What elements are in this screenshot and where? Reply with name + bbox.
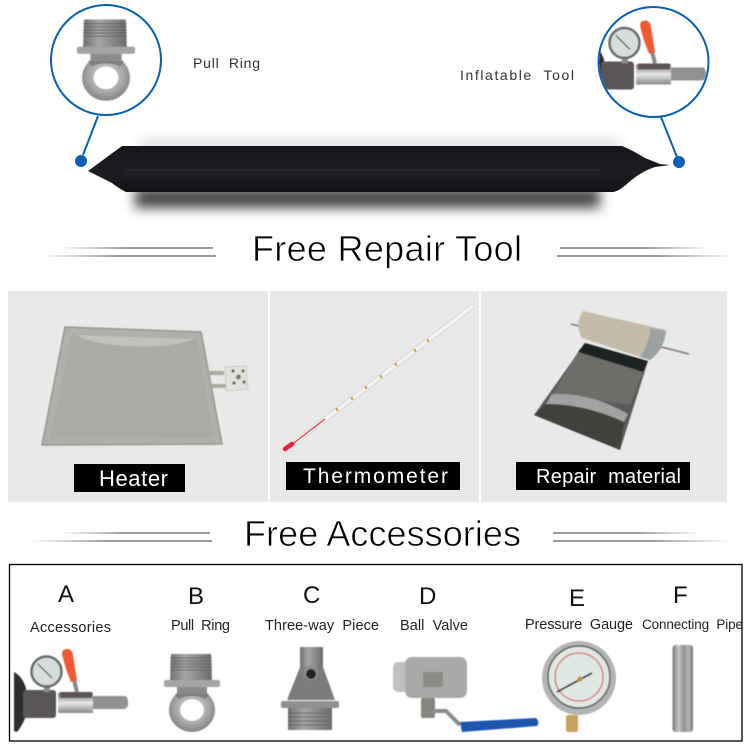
heading: free repair tool: Free Repair Tool (252, 228, 522, 269)
item F: connecting pipe (642, 582, 743, 732)
label: thermometer (286, 462, 460, 490)
icon: thermometer (285, 306, 473, 449)
icon: inflatable tool (14, 649, 128, 732)
panel: repair material (481, 291, 727, 502)
item A: accessories (14, 581, 128, 732)
item C: three-way piece (265, 582, 379, 730)
item B: pull ring (164, 583, 230, 732)
item A: accessories: Accessories (30, 620, 111, 636)
item C: three-way piece: C (303, 582, 320, 609)
callout: pull ring (51, 5, 161, 167)
icon: three-way piece (281, 647, 339, 730)
panel: thermometer (270, 291, 479, 502)
decorative heading lines left (30, 532, 212, 542)
label: heater: Heater (99, 466, 168, 491)
decorative heading lines right (557, 247, 735, 257)
label: heater (74, 464, 185, 492)
icon: connecting pipe (672, 645, 693, 732)
label: repair material (516, 462, 690, 490)
airbag product (88, 140, 670, 208)
item E: pressure gauge: Pressure Gauge (525, 617, 633, 633)
item D: ball valve (393, 583, 538, 732)
item F: connecting pipe: F (673, 582, 688, 609)
label: thermometer: Thermometer (303, 465, 448, 488)
icon: pull ring (164, 654, 220, 732)
icon: pull ring detail (77, 20, 135, 101)
icon: heater plate (42, 327, 248, 445)
decorative heading lines right (553, 532, 730, 542)
item F: connecting pipe: Connecting Pipe (642, 617, 743, 632)
item D: ball valve: Ball Valve (400, 618, 468, 634)
icon: inflatable tool detail (600, 20, 706, 90)
panel: heater (8, 291, 268, 502)
icon: ball valve (393, 657, 538, 732)
item C: three-way piece: Three-way Piece (265, 618, 379, 634)
decorative heading lines left (40, 247, 216, 257)
label: repair material: Repair material (536, 466, 681, 488)
item B: pull ring: B (188, 583, 204, 610)
heading: free accessories: Free Accessories (244, 513, 521, 554)
item B: pull ring: Pull Ring (171, 618, 230, 634)
item D: ball valve: D (419, 583, 436, 610)
item E: pressure gauge (525, 585, 633, 732)
label: pull ring: Pull Ring (193, 55, 260, 71)
icon: repair material roll (534, 311, 689, 450)
label: inflatable tool: Inflatable Tool (460, 67, 574, 83)
item E: pressure gauge: E (569, 585, 585, 612)
callout: inflatable tool (592, 7, 708, 168)
icon: pressure gauge (542, 641, 616, 732)
item A: accessories: A (58, 581, 74, 608)
panel: accessories (10, 564, 743, 741)
